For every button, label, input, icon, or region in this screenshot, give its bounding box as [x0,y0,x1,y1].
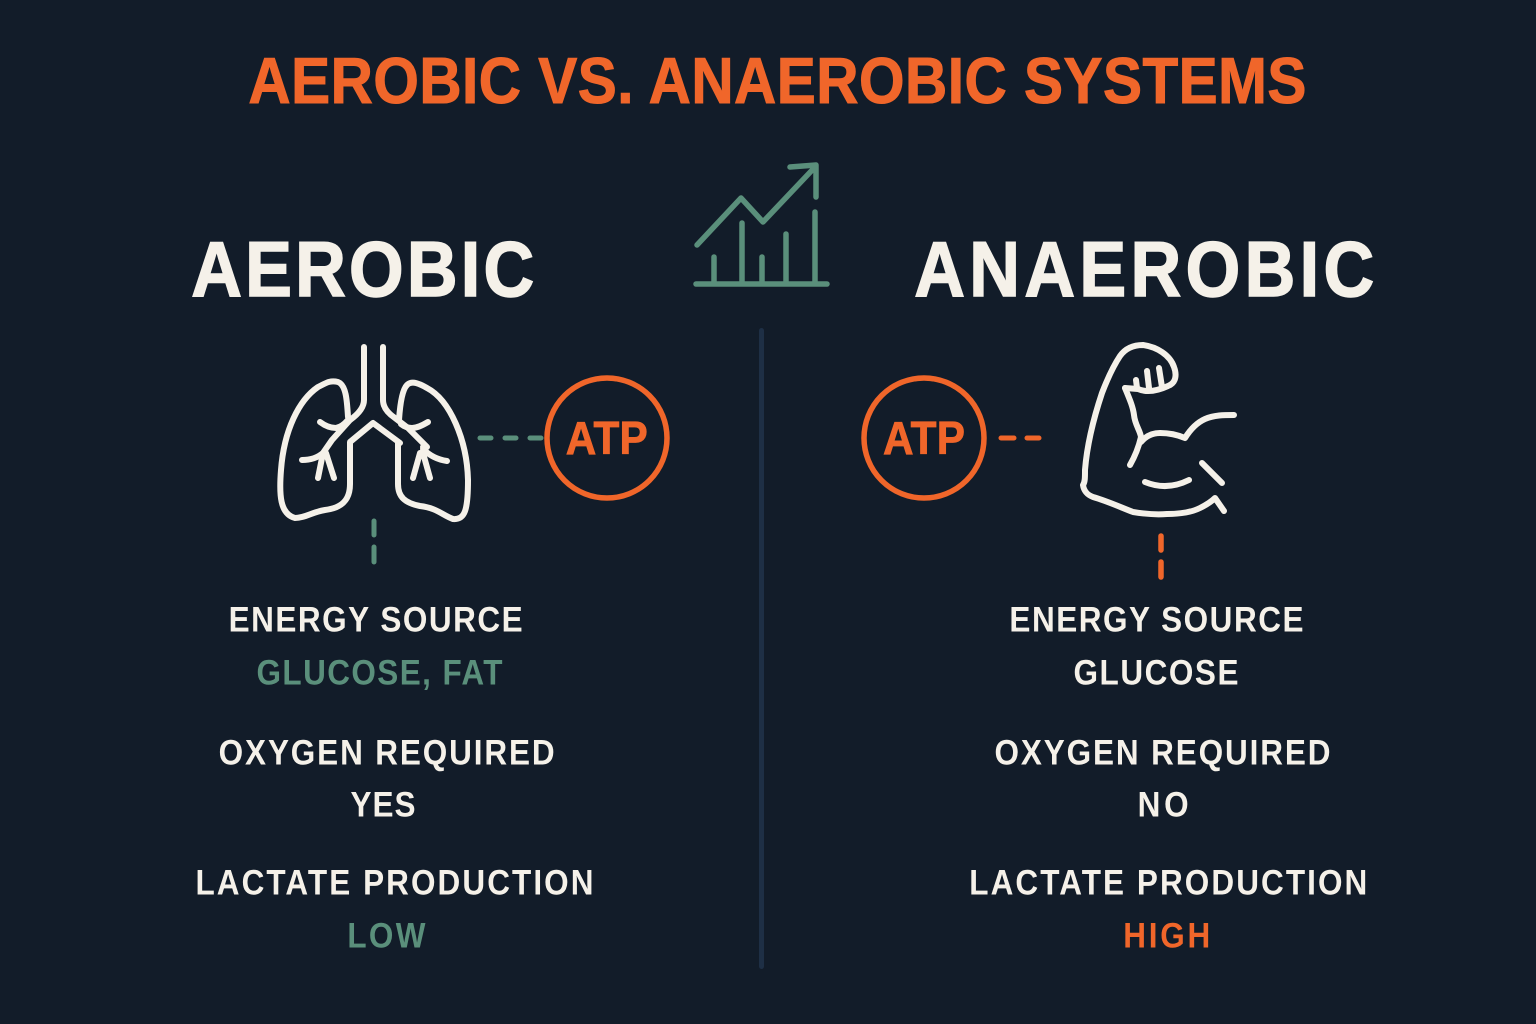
center divider [759,328,764,969]
stat: oxygen required: NO [1138,786,1189,825]
panel: anaerobic [864,226,1374,956]
connector: lungs to stats [372,521,376,562]
stat: energy source: GLUCOSE, FAT [257,654,502,693]
connector: ATP to muscle [1001,436,1039,440]
connector: lungs to ATP [480,436,543,440]
stat: energy source [229,601,523,693]
icon: lungs [280,347,468,519]
badge: ATP [547,378,667,498]
icon: rising chart [696,165,827,284]
badge: ATP [864,378,984,498]
heading: anaerobic: ANAEROBIC [914,226,1374,313]
connector: muscle to stats [1158,536,1164,577]
stat: lactate production [195,864,593,956]
stat: lactate production: LOW [347,917,426,956]
stat: energy source: ENERGY SOURCE [1009,601,1303,640]
stat: energy source: ENERGY SOURCE [229,601,523,640]
badge: ATP: ATP [883,413,965,464]
stat: oxygen required: OXYGEN REQUIRED [995,734,1330,773]
stat: energy source [1009,601,1303,693]
stat: energy source: GLUCOSE [1074,654,1238,693]
stat: oxygen required: YES [351,786,416,825]
badge: ATP: ATP [566,413,648,464]
stat: oxygen required: OXYGEN REQUIRED [219,734,555,773]
stat: lactate production: HIGH [1123,917,1210,956]
stat: oxygen required [219,734,555,825]
stat: oxygen required [995,734,1330,825]
stat: lactate production: LACTATE PRODUCTION [969,864,1367,903]
stat: lactate production: LACTATE PRODUCTION [195,864,593,903]
icon: flexed arm [1083,345,1234,514]
heading: aerobic: AEROBIC [191,226,534,313]
title: AEROBIC VS. ANAEROBIC SYSTEMS [248,45,1306,118]
panel: aerobic [191,226,667,956]
stat: lactate production [969,864,1367,956]
